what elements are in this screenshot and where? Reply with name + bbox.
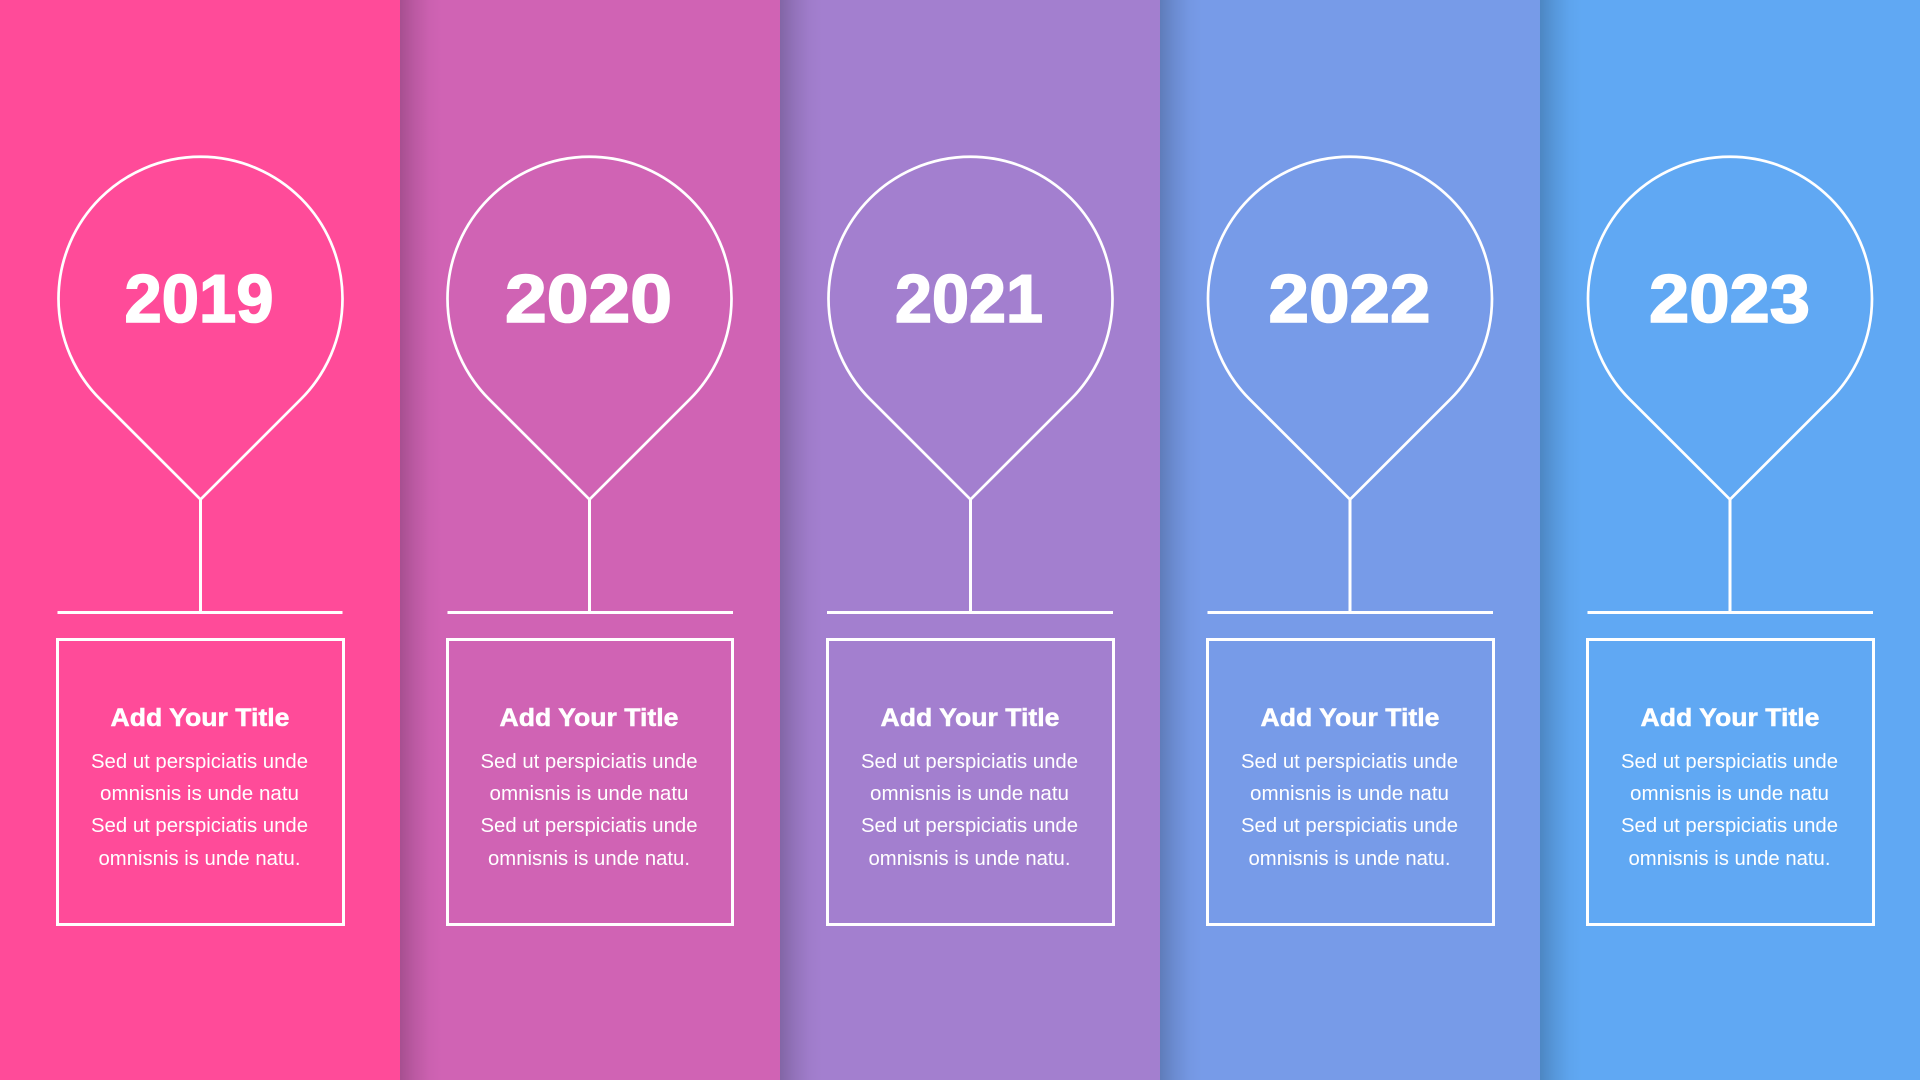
body text 2023 [1621, 751, 1838, 870]
panel shadow 2023 [1540, 0, 1582, 1080]
panel background 2021 [780, 0, 1160, 1080]
text box 2020 [448, 640, 732, 924]
year 2023: 2023 [1649, 261, 1810, 337]
icon: pin 2019 [58, 157, 343, 500]
body text 2023: Sed ut perspiciatis unde [1621, 815, 1838, 837]
body text 2019: Sed ut perspiciatis unde [91, 751, 308, 773]
heading 2019: Add Your Title [110, 704, 290, 732]
text box 2023 [1588, 640, 1874, 924]
icon: pin 2021 [828, 157, 1112, 500]
year 2020: 2020 [505, 261, 672, 337]
body text 2021: omnisnis is unde natu. [868, 848, 1070, 870]
body text 2020: omnisnis is unde natu [490, 783, 688, 805]
body text 2022 [1241, 751, 1458, 870]
body text 2022: Sed ut perspiciatis unde [1241, 815, 1458, 837]
icon: pin 2020 [447, 157, 731, 500]
panel shadow 2021 [780, 0, 822, 1080]
heading 2021: Add Your Title [880, 704, 1060, 732]
panel: 2019 [0, 0, 400, 1080]
icon: pin 2022 [1208, 157, 1492, 500]
body text 2019: omnisnis is unde natu [100, 783, 299, 805]
panel background 2023 [1540, 0, 1920, 1080]
body text 2022: Sed ut perspiciatis unde [1241, 751, 1458, 773]
body text 2022: omnisnis is unde natu [1250, 783, 1449, 805]
year 2019: 2019 [124, 261, 274, 337]
panel: 2022 [1160, 0, 1540, 1080]
body text 2021: omnisnis is unde natu [870, 783, 1069, 805]
body text 2021: Sed ut perspiciatis unde [861, 815, 1078, 837]
panel: 2021 [780, 0, 1160, 1080]
year 2022: 2022 [1268, 261, 1430, 337]
body text 2023: omnisnis is unde natu [1630, 783, 1829, 805]
body text 2022: omnisnis is unde natu. [1248, 848, 1450, 870]
pin stem 2023 [1588, 500, 1873, 612]
heading 2022: Add Your Title [1260, 704, 1440, 732]
body text 2019: Sed ut perspiciatis unde [91, 815, 308, 837]
body text 2020: Sed ut perspiciatis unde [480, 815, 698, 837]
panel: 2020 [400, 0, 780, 1080]
panel background 2022 [1160, 0, 1540, 1080]
panel: 2023 [1540, 0, 1920, 1080]
text box 2021 [828, 640, 1114, 924]
year 2021: 2021 [895, 261, 1043, 337]
panel background 2019 [0, 0, 400, 1080]
panel shadow 2022 [1160, 0, 1202, 1080]
heading 2023: Add Your Title [1640, 704, 1820, 732]
icon: pin 2023 [1588, 157, 1872, 500]
text box 2019 [58, 640, 344, 924]
text box 2022 [1208, 640, 1494, 924]
pin stem 2020 [448, 500, 733, 612]
pin stem 2021 [827, 500, 1113, 612]
body text 2023: omnisnis is unde natu. [1628, 848, 1830, 870]
body text 2020 [480, 751, 698, 870]
body text 2019 [91, 751, 308, 870]
body text 2021 [861, 751, 1078, 870]
panel background 2020 [400, 0, 780, 1080]
pin stem 2022 [1208, 500, 1493, 612]
heading 2020: Add Your Title [500, 704, 679, 732]
body text 2020: Sed ut perspiciatis unde [480, 751, 698, 773]
body text 2020: omnisnis is unde natu. [488, 848, 690, 870]
body text 2019: omnisnis is unde natu. [98, 848, 300, 870]
panel shadow 2020 [400, 0, 442, 1080]
body text 2023: Sed ut perspiciatis unde [1621, 751, 1838, 773]
pin stem 2019 [58, 500, 342, 612]
body text 2021: Sed ut perspiciatis unde [861, 751, 1078, 773]
